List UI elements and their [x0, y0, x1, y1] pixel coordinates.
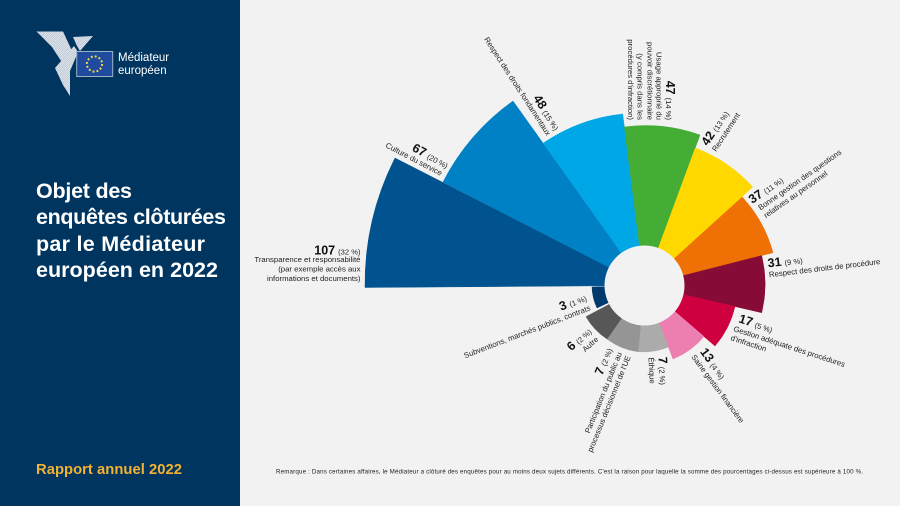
label: saine gestion financière: Saine gestion financière: [689, 353, 746, 425]
radial chart: [365, 101, 773, 359]
label: autre: Autre: [581, 335, 600, 354]
logo: européen: [118, 65, 167, 77]
label: recrutement: Recrutement: [710, 110, 743, 153]
logo: Médiateur: [118, 52, 169, 64]
label: droits de procédure: [767, 243, 881, 279]
footnote: Remarque : Dans certaines affaires, le Médiateur a clôturé des enquêtes pour au moins deux sujets différents. C'est la raison pour laquelle la somme des pourcentages ci-dessus est supérieure à 100 %.: [276, 468, 863, 476]
label: transparence: informations et documents): [267, 274, 361, 283]
label: usage approprié du pouvoir: (y compris dans les: [636, 53, 644, 120]
label: culture du service: 67(20 %): [410, 141, 452, 172]
label: autre: [564, 324, 601, 360]
label: usage approprié du pouvoir: 47 (14 %): [663, 81, 677, 120]
annual report label: Rapport annuel 2022: [36, 462, 182, 478]
label: gestion des procédures d'infraction: [729, 311, 851, 378]
title: par le Médiateur: [36, 232, 206, 256]
label: éthique: Éthique: [647, 357, 657, 384]
label: droits fondamentaux: 48(15 %): [530, 92, 564, 133]
label: droits de procédure: Respect des droits de procédure: [768, 257, 881, 279]
label: usage approprié du pouvoir: procédures d'infraction): [626, 39, 635, 120]
title: européen en 2022: [36, 258, 218, 282]
label: recrutement: 42(13 %): [698, 107, 732, 148]
label: subventions: Subventions, marchés publics, contrats: [463, 303, 592, 360]
label: transparence: Transparence et responsabilité: [254, 255, 360, 264]
label: éthique: [647, 356, 671, 386]
label: culture du service: Culture du service: [384, 141, 444, 178]
label: questions relatives au personnel: [746, 136, 849, 222]
label: saine gestion financière: 13(4 %): [697, 345, 730, 382]
title: enquêtes clôturées: [36, 205, 226, 229]
label: usage approprié du pouvoir: pouvoir discrétionnaire: [646, 42, 654, 120]
title: [36, 179, 226, 282]
label: gestion des procédures d'infraction: d'infraction: [729, 333, 768, 353]
label: droits de procédure: 31(9 %): [767, 252, 804, 270]
label: usage approprié du pouvoir: Usage approprié du: [654, 52, 664, 120]
label: questions relatives au personnel: Bonne gestion des questions: [756, 148, 843, 212]
label: questions relatives au personnel: 37(11 %): [746, 173, 786, 206]
label: questions relatives au personnel: relatives au personnel: [762, 169, 829, 220]
panel: left sidebar: [0, 0, 240, 506]
label: droits fondamentaux: Respect des droits fondamentaux: [482, 35, 553, 137]
label: gestion des procédures d'infraction: Gestion adéquate des procédures: [732, 324, 846, 369]
title: Objet des: [36, 179, 132, 203]
label: subventions: 3(1 %): [557, 290, 589, 314]
label: culture du service: [384, 129, 452, 179]
label: participation du public: Participation du public au: [583, 351, 624, 435]
label: autre: 6(2 %): [564, 324, 595, 354]
label: transparence: (par exemple accès aux: [278, 264, 361, 274]
label: participation du public: processus décisionnel de l'UE: [586, 354, 633, 453]
label: éthique: 7 (2 %): [655, 356, 671, 386]
label: transparence: 107 (32 %): [314, 244, 361, 258]
logo: [36, 32, 169, 96]
label: transparence: [254, 244, 361, 283]
label: gestion des procédures d'infraction: 17(5 %): [737, 312, 775, 336]
label: participation du public: 7(2 %): [592, 345, 616, 377]
label: usage approprié du pouvoir: [626, 39, 677, 120]
label: recrutement: [698, 103, 743, 153]
label: participation du public: [564, 345, 633, 453]
